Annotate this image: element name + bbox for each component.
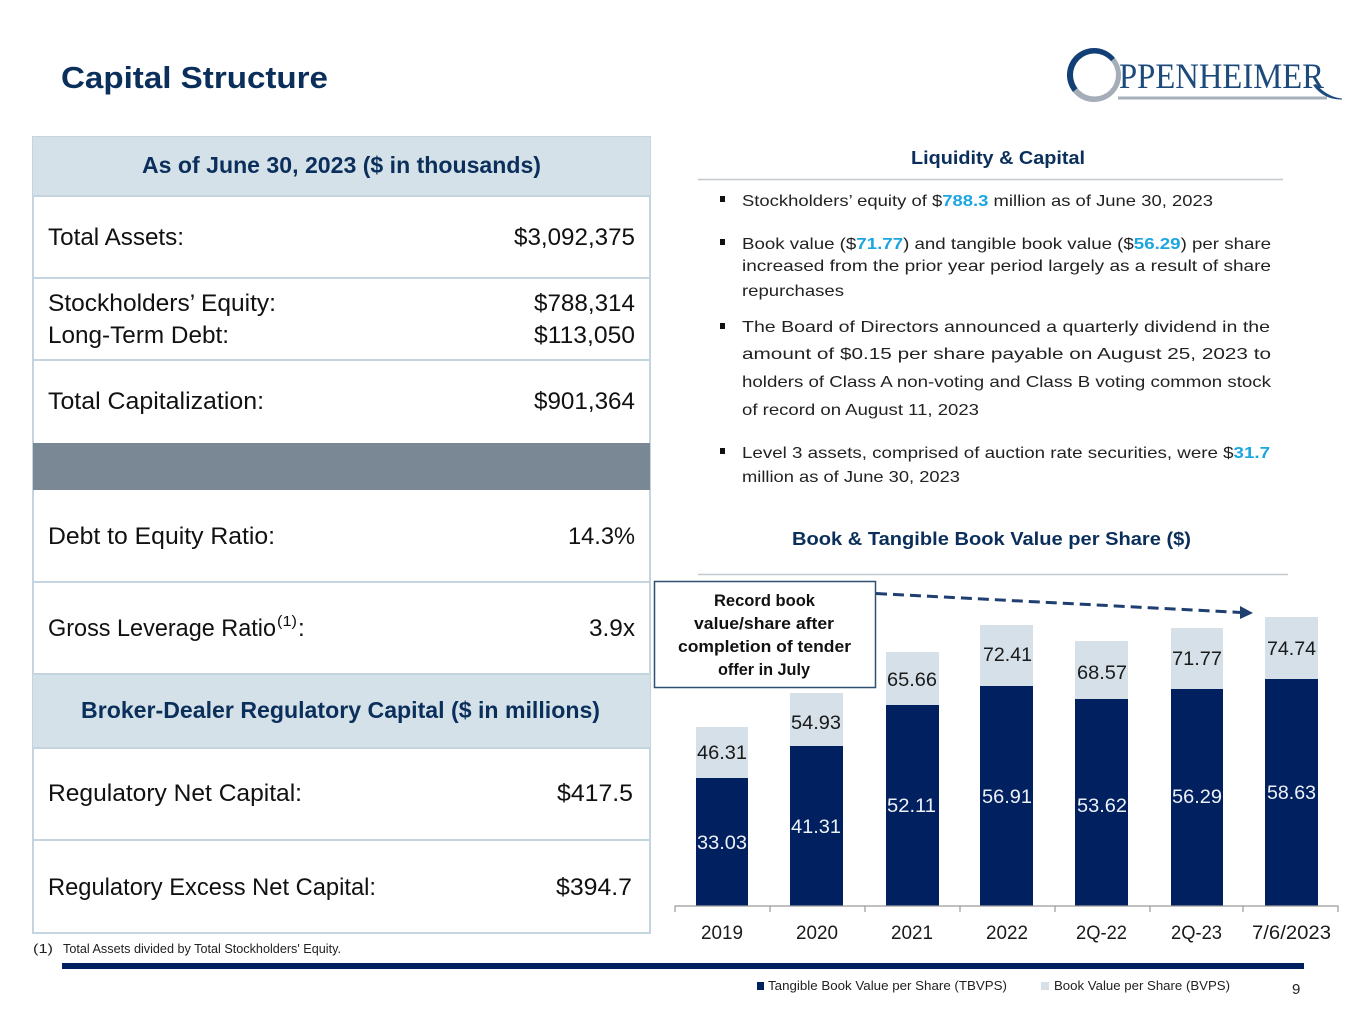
logo: Oppenheimer: PPENHEIMER bbox=[1119, 56, 1324, 96]
footnote: Total Assets divided by Total Stockholders' Equity. bbox=[63, 942, 341, 956]
bullet: level 3 assets bbox=[720, 445, 1270, 486]
row: gross leverage bbox=[48, 613, 635, 642]
bar: 2Q-23: 71.77 bbox=[1172, 648, 1222, 670]
callout: record book value: Record book bbox=[714, 592, 816, 610]
bar: 2021: 52.11 bbox=[887, 795, 936, 817]
bullet: dividend bbox=[720, 319, 1272, 419]
row: equity and debt: $113,050 bbox=[534, 322, 635, 349]
bar: 2021 bbox=[886, 652, 939, 906]
row: debt to equity: Debt to Equity Ratio: bbox=[48, 523, 275, 550]
bar: 2Q-22: 53.62 bbox=[1077, 795, 1127, 817]
legend: Tangible Book Value per Share (TBVPS) bbox=[768, 978, 1007, 993]
table header: as of date: As of June 30, 2023 ($ in thousands) bbox=[142, 152, 541, 178]
bar: 2020: 54.93 bbox=[791, 712, 841, 734]
bullet: dividend: holders of Class A non-voting and Class B voting common stock bbox=[742, 374, 1272, 391]
bar: 2021: 65.66 bbox=[887, 669, 937, 691]
table header: as of date bbox=[33, 137, 650, 196]
row: total assets bbox=[48, 224, 635, 251]
row: net capital bbox=[48, 780, 633, 807]
heading: liquidity and capital: Liquidity & Capital bbox=[911, 147, 1085, 168]
row: gross leverage: Gross Leverage Ratio bbox=[48, 615, 276, 642]
x axis: 2Q-23 bbox=[1171, 923, 1222, 944]
arrow: dashed trend bbox=[876, 594, 1253, 619]
table header: regulatory capital bbox=[33, 674, 650, 748]
bullet: dividend: amount of $0.15 per share payable on August 25, 2023 to bbox=[742, 346, 1271, 363]
row: total capitalization: Total Capitalization: bbox=[48, 388, 264, 415]
row: equity and debt: Long-Term Debt: bbox=[48, 322, 229, 349]
row: total capitalization bbox=[48, 388, 635, 415]
title: Capital Structure bbox=[61, 60, 328, 95]
row: debt to equity bbox=[48, 523, 635, 550]
legend: Book Value per Share (BVPS) bbox=[1054, 978, 1230, 993]
bar: 2020 bbox=[790, 693, 843, 906]
callout: record book value: completion of tender bbox=[678, 638, 852, 656]
bullet: stockholders equity: Stockholders’ equity of $ 788.3 million as of June 30, 2023 bbox=[742, 193, 1213, 210]
row: net capital: $417.5 bbox=[557, 780, 633, 807]
callout: record book value bbox=[654, 582, 876, 688]
x axis: 2021 bbox=[891, 923, 933, 944]
bar: 7/6/2023: 58.63 bbox=[1267, 782, 1316, 804]
row: gross leverage: : bbox=[298, 615, 305, 642]
bar: 7/6/2023: 74.74 bbox=[1267, 638, 1316, 660]
row: debt to equity: 14.3% bbox=[568, 523, 635, 550]
row: equity and debt bbox=[48, 290, 635, 349]
x axis bbox=[675, 906, 1338, 944]
table header: regulatory capital: Broker-Dealer Regulatory Capital ($ in millions) bbox=[81, 697, 600, 723]
bar: 2Q-23 bbox=[1171, 628, 1223, 906]
bullet: level 3 assets: Level 3 assets, comprised of auction rate securities, were $ 31.7 bbox=[742, 445, 1270, 462]
bar: 2022: 56.91 bbox=[982, 786, 1032, 808]
row: total assets: $3,092,375 bbox=[514, 224, 635, 251]
bar: 2022: 72.41 bbox=[983, 644, 1032, 666]
row: equity and debt: Stockholders’ Equity: bbox=[48, 290, 276, 317]
x axis: 7/6/2023 bbox=[1252, 923, 1331, 944]
x axis: 2019 bbox=[701, 923, 743, 944]
row: equity and debt: $788,314 bbox=[534, 290, 635, 317]
row: total capitalization: $901,364 bbox=[534, 388, 635, 415]
bullet: book value: increased from the prior year period largely as a result of share bbox=[742, 258, 1271, 275]
row: net capital: Regulatory Net Capital: bbox=[48, 780, 302, 807]
bullet: dividend: of record on August 11, 2023 bbox=[742, 402, 979, 419]
page number: 9 bbox=[1292, 981, 1300, 998]
row: gross leverage: 3.9x bbox=[589, 615, 635, 642]
bullet: book value: Book value ($ 71.77 ) and tangible book value ($ 56.29 ) per share bbox=[742, 236, 1271, 253]
row: excess net capital: $394.7 bbox=[556, 874, 632, 901]
footer rule bbox=[62, 963, 1304, 969]
bar: 2022 bbox=[980, 625, 1033, 906]
x axis: 2022 bbox=[986, 923, 1028, 944]
grey separator band bbox=[33, 443, 650, 490]
x axis: 2Q-22 bbox=[1076, 923, 1127, 944]
row: total assets: Total Assets: bbox=[48, 224, 184, 251]
heading: chart title: Book & Tangible Book Value per Share ($) bbox=[792, 528, 1191, 549]
bar: 2019: 33.03 bbox=[697, 832, 747, 854]
bullet: dividend: The Board of Directors announced a quarterly dividend in the bbox=[742, 319, 1270, 336]
x axis: 2020 bbox=[796, 923, 838, 944]
panel: liquidity and capital bbox=[698, 147, 1283, 486]
bar: 2019: 46.31 bbox=[697, 742, 747, 764]
row: gross leverage: (1) bbox=[277, 613, 297, 630]
row: excess net capital bbox=[48, 874, 632, 901]
footnote: (1) bbox=[33, 941, 53, 956]
bar: 7/6/2023 bbox=[1265, 617, 1318, 906]
callout: record book value: value/share after bbox=[694, 615, 835, 633]
bullet: book value: repurchases bbox=[742, 283, 844, 300]
bar: 2Q-23: 56.29 bbox=[1172, 786, 1222, 808]
bullet: level 3 assets: million as of June 30, 2023 bbox=[742, 469, 960, 486]
legend bbox=[757, 978, 1230, 993]
bullet: book value bbox=[720, 236, 1271, 300]
panel: capital table bbox=[33, 137, 650, 933]
bar: 2019 bbox=[696, 727, 748, 906]
callout: record book value: offer in July bbox=[718, 661, 811, 679]
bar: 2Q-22: 68.57 bbox=[1077, 662, 1127, 684]
bar: 2020: 41.31 bbox=[791, 816, 841, 838]
bar: 2Q-22 bbox=[1075, 641, 1128, 906]
panel: book value chart bbox=[654, 528, 1338, 993]
row: excess net capital: Regulatory Excess Net Capital: bbox=[48, 874, 376, 901]
logo: Oppenheimer bbox=[1067, 48, 1342, 102]
